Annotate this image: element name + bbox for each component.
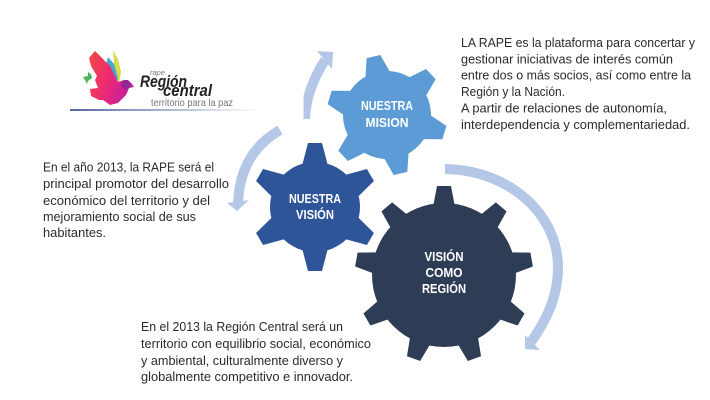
text block: region description: y ambiental, culturalmente diverso y [141,353,343,368]
icon: small green bird [83,72,92,84]
text block: vision description: habitantes. [43,225,106,240]
label: vision como region: REGIÓN [422,281,466,296]
label: nuestra vision [289,192,341,222]
logo word: Región: Región [140,72,187,91]
arrow: large arc around vision como region [445,169,558,350]
text block: region description: territorio con equilibrio social, económico [141,336,371,351]
icon: dove body [89,51,134,105]
text block: region description: globalmente competitivo e innovador. [141,369,353,384]
logo tagline: territorio para la paz [151,98,233,109]
text block: mision description: entre dos o más socios, así como entre la [461,68,692,82]
gear: vision como region [354,186,534,362]
logo word: central: central [163,81,213,100]
label: nuestra vision: NUESTRA [289,192,341,206]
label: vision como region: VISIÓN [424,249,464,264]
text block: vision description: económico del territorio y del [43,193,210,208]
text block: region description: En el 2013 la Región Central será un [141,319,343,334]
logo word: rape: rape. [150,70,167,77]
text block: vision description: principal promotor del desarrollo [43,176,229,191]
text block: vision description: mejoramiento social de sus [43,209,196,224]
arrow: towards nuestra vision [227,130,280,211]
label: nuestra vision: VISIÓN [296,207,334,222]
gear: nuestra mision [326,54,448,176]
label: vision como region [422,249,466,296]
logo: Región Central [70,50,260,111]
label: nuestra mision: MISION [366,116,408,130]
text block: vision description [43,160,229,240]
arrow: vision to mision [305,51,333,119]
text block: mision description: LA RAPE es la plataforma para concertar y [461,35,695,50]
text block: mision description: gestionar iniciativas de interés común [461,52,673,66]
icon: dove head [122,80,130,89]
text block: mision description [461,35,695,132]
text block: vision description: En el año 2013, la RAPE será el [43,160,214,174]
text block: region description [141,319,371,384]
gear: nuestra vision [253,143,377,271]
text block: mision description: Región y la Nación. [461,84,565,99]
text block: mision description: A partir de relaciones de autonomía, [461,100,667,116]
icon: yellow and blue wing feathers [104,50,121,88]
logo underline [70,109,260,111]
label: vision como region: COMO [426,266,463,280]
text block: mision description: interdependencia y complementariedad. [461,117,690,132]
label: nuestra mision [361,99,413,130]
label: nuestra mision: NUESTRA [361,99,413,113]
